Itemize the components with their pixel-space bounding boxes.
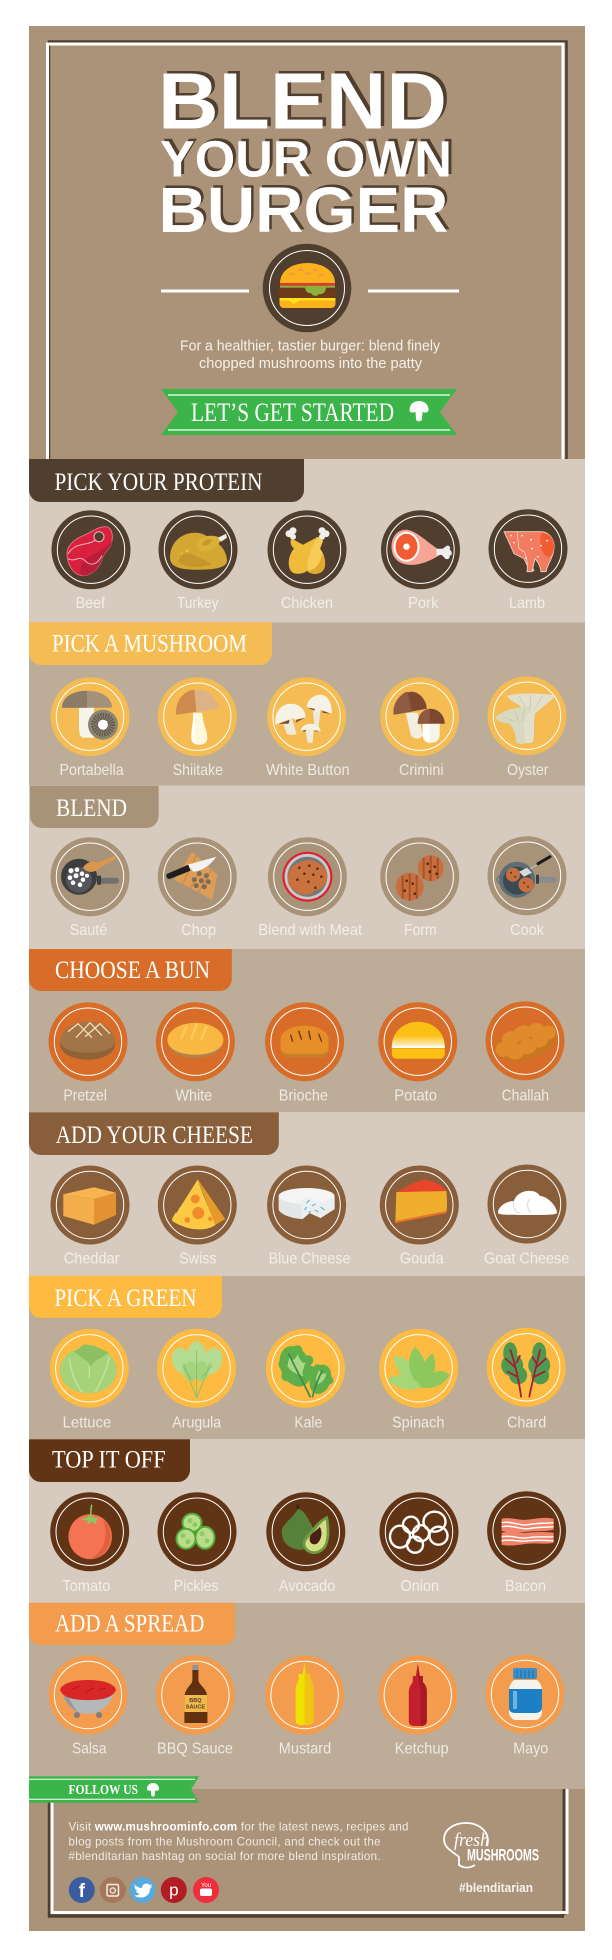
heading: pick your protein bbox=[29, 459, 304, 502]
item: blend with meat: Blend with Meat bbox=[258, 922, 362, 939]
subtitle bbox=[180, 338, 440, 372]
item: portabella: Portabella bbox=[60, 762, 124, 779]
heading: add your cheese bbox=[29, 1112, 279, 1155]
icon: pork bbox=[392, 530, 452, 565]
icon: potato bun bbox=[392, 1022, 445, 1059]
item: onion bbox=[380, 1492, 458, 1595]
section: add your cheese bbox=[29, 1112, 585, 1276]
icon: lettuce bbox=[60, 1344, 117, 1393]
social icons bbox=[69, 1877, 219, 1903]
item: onion: Onion bbox=[400, 1578, 439, 1595]
icon: blue cheese bbox=[279, 1188, 335, 1219]
heading: add a spread bbox=[29, 1603, 235, 1645]
item: cook bbox=[488, 836, 566, 939]
item: bacon: Bacon bbox=[505, 1578, 546, 1595]
icon: chopping board bbox=[166, 852, 217, 900]
item: lettuce bbox=[50, 1329, 129, 1431]
icon: ketchup bottle bbox=[409, 1664, 427, 1726]
icon: shiitake bbox=[176, 690, 218, 745]
item: pickles: Pickles bbox=[174, 1578, 218, 1595]
title: BURGER bbox=[158, 174, 448, 246]
item: chard bbox=[487, 1328, 566, 1431]
section: blend bbox=[29, 786, 585, 949]
item: white button: White Button bbox=[266, 762, 350, 779]
heading: pick your protein: PICK YOUR PROTEIN bbox=[54, 469, 262, 496]
item: turkey bbox=[158, 510, 238, 612]
item: shiitake: Shiitake bbox=[173, 762, 223, 779]
item: chicken: Chicken bbox=[281, 595, 333, 612]
icon: swiss bbox=[172, 1179, 225, 1229]
item: form: Form bbox=[404, 922, 437, 939]
item: portabella bbox=[50, 677, 130, 779]
icon: pinterest bbox=[161, 1877, 187, 1903]
item: goat cheese: Goat Cheese bbox=[484, 1250, 569, 1267]
icon: bacon bbox=[502, 1518, 554, 1546]
item: brioche bbox=[265, 1002, 344, 1105]
item: gouda bbox=[380, 1166, 459, 1267]
banner: follow us: FOLLOW US bbox=[68, 1782, 138, 1797]
item: arugula bbox=[157, 1329, 236, 1431]
item: tomato bbox=[50, 1492, 129, 1595]
icon: facebook: f bbox=[79, 1881, 86, 1902]
item: beef: Beef bbox=[76, 595, 105, 612]
item: oyster: Oyster bbox=[507, 762, 549, 779]
text block: follow info: blog posts from the Mushroom Council, and check out the bbox=[68, 1835, 380, 1848]
item: kale bbox=[266, 1329, 345, 1431]
item: mayo: Mayo bbox=[513, 1740, 548, 1757]
icon: portabella bbox=[62, 691, 118, 740]
section: add a spread bbox=[29, 1603, 585, 1789]
icon: burger badge bbox=[263, 244, 351, 332]
item: spinach bbox=[379, 1329, 458, 1431]
icon: beef bbox=[67, 527, 112, 576]
item: salsa bbox=[48, 1656, 128, 1757]
item: saute bbox=[50, 837, 130, 939]
banner: let's get started: LET’S GET STARTED bbox=[191, 398, 394, 427]
item: chard: Chard bbox=[507, 1414, 546, 1431]
item: chicken bbox=[268, 510, 346, 612]
item: goat cheese bbox=[484, 1164, 569, 1267]
item: oyster bbox=[488, 676, 566, 779]
panel: footer bbox=[29, 1776, 585, 1931]
icon: brioche bbox=[281, 1026, 329, 1058]
heading: choose a bun: CHOOSE A BUN bbox=[55, 957, 210, 984]
icon: grill pan bbox=[497, 857, 557, 898]
section: top it off bbox=[29, 1439, 585, 1603]
icon: youtube: You bbox=[201, 1883, 211, 1889]
item: white bun: White bbox=[175, 1088, 212, 1105]
heading: add your cheese: ADD YOUR CHEESE bbox=[56, 1122, 253, 1149]
item: ketchup: Ketchup bbox=[395, 1740, 449, 1757]
item: potato bbox=[378, 1002, 457, 1105]
icon: instagram bbox=[100, 1877, 126, 1903]
section: pick a mushroom bbox=[29, 622, 585, 786]
item: pork bbox=[381, 510, 460, 612]
title: BURGER bbox=[161, 172, 451, 244]
item: challah: Challah bbox=[502, 1088, 549, 1105]
heading: pick a mushroom: PICK A MUSHROOM bbox=[52, 631, 247, 658]
item: blend with meat bbox=[258, 837, 362, 939]
item: lamb: Lamb bbox=[509, 595, 545, 612]
title: YOUR OWN bbox=[163, 128, 455, 185]
item: cook: Cook bbox=[510, 922, 545, 939]
icon: spinach bbox=[388, 1347, 450, 1389]
icon: goat cheese bbox=[498, 1191, 557, 1215]
heading: choose a bun bbox=[29, 949, 232, 991]
icon: challah bbox=[491, 1017, 561, 1068]
heading: blend bbox=[30, 786, 159, 828]
heading: pick a green bbox=[29, 1276, 222, 1318]
text block: follow info: Visit www.mushroominfo.com for the latest news, recipes and bbox=[68, 1821, 408, 1834]
heading: add a spread: ADD A SPREAD bbox=[55, 1611, 204, 1638]
icon: oyster bbox=[495, 693, 555, 744]
title bbox=[158, 54, 455, 246]
item: challah bbox=[486, 1001, 564, 1105]
item: pickles bbox=[158, 1492, 236, 1595]
icon: mixing bowl bbox=[282, 852, 332, 902]
item: pork: Pork bbox=[408, 595, 439, 612]
icon: white button bbox=[275, 695, 332, 743]
icon: saute pan bbox=[61, 856, 119, 895]
item: lamb bbox=[488, 509, 568, 612]
icon: mayo jar bbox=[509, 1668, 542, 1720]
text block: follow info: #blenditarian hashtag on social for more blend inspiration. bbox=[68, 1850, 380, 1863]
icon: lamb bbox=[504, 532, 554, 572]
item: brioche: Brioche bbox=[279, 1088, 328, 1105]
panel: hero header bbox=[29, 26, 585, 459]
icon: avocado bbox=[282, 1505, 329, 1554]
item: form bbox=[380, 837, 459, 939]
heading: pick a mushroom bbox=[29, 622, 272, 665]
item: cheddar: Cheddar bbox=[64, 1250, 120, 1267]
banner: let's get started bbox=[161, 389, 457, 435]
icon: turkey bbox=[170, 533, 227, 570]
section: pick your protein bbox=[29, 459, 585, 622]
icon: patties bbox=[396, 855, 444, 901]
item: turkey: Turkey bbox=[177, 595, 218, 612]
heading: blend: BLEND bbox=[56, 795, 127, 822]
item: tomato: Tomato bbox=[62, 1578, 110, 1595]
item: spinach: Spinach bbox=[392, 1414, 444, 1431]
icon: arugula bbox=[168, 1341, 227, 1398]
icon: bbq sauce bottle: SAUCE bbox=[186, 1704, 205, 1710]
item: ketchup bbox=[378, 1656, 457, 1757]
item: avocado: Avocado bbox=[279, 1578, 335, 1595]
item: white button bbox=[266, 677, 350, 779]
item: swiss: Swiss bbox=[179, 1250, 216, 1267]
item: chop bbox=[158, 837, 237, 939]
item: kale: Kale bbox=[294, 1414, 322, 1431]
icon: onion bbox=[390, 1512, 448, 1553]
item: avocado bbox=[266, 1492, 345, 1595]
item: chop: Chop bbox=[181, 922, 216, 939]
icon: salsa bbox=[60, 1680, 116, 1718]
item: lettuce: Lettuce bbox=[63, 1414, 111, 1431]
heading: top it off bbox=[29, 1439, 190, 1482]
item: swiss bbox=[158, 1166, 237, 1267]
icon: facebook bbox=[69, 1877, 95, 1903]
icon: pretzel bun bbox=[60, 1022, 115, 1060]
text block: follow info bbox=[68, 1821, 408, 1863]
icon: youtube bbox=[193, 1877, 219, 1903]
item: arugula: Arugula bbox=[172, 1414, 221, 1431]
item: bbq sauce: BBQ Sauce bbox=[157, 1740, 233, 1757]
item: pretzel: Pretzel bbox=[63, 1088, 107, 1105]
icon: pinterest: p bbox=[169, 1880, 179, 1900]
item: shiitake bbox=[158, 677, 237, 779]
icon: crimini bbox=[393, 692, 445, 743]
icon: chicken bbox=[286, 527, 330, 574]
item: saute: Sauté bbox=[70, 922, 107, 939]
item: gouda: Gouda bbox=[400, 1250, 444, 1267]
item: white bun bbox=[156, 1002, 235, 1105]
heading: top it off: TOP IT OFF bbox=[52, 1447, 166, 1474]
item: potato: Potato bbox=[394, 1088, 437, 1105]
item: salsa: Salsa bbox=[72, 1740, 107, 1757]
title: BLEND bbox=[162, 54, 450, 143]
icon: mustard bottle bbox=[296, 1663, 314, 1725]
title: YOUR OWN bbox=[160, 130, 452, 188]
icon: pickles bbox=[176, 1514, 214, 1549]
logo: fresh mushrooms: MUSHROOMS bbox=[467, 1846, 539, 1864]
icon: chard bbox=[501, 1342, 550, 1397]
logo: fresh mushrooms bbox=[444, 1823, 539, 1868]
icon: bbq sauce bottle: BBQ bbox=[189, 1698, 202, 1704]
subtitle: For a healthier, tastier burger: blend finely bbox=[180, 338, 440, 354]
icon: mushroom bbox=[410, 401, 428, 421]
logo: fresh mushrooms: fresh bbox=[454, 1830, 489, 1851]
item: crimini bbox=[380, 677, 459, 779]
item: bbq sauce bbox=[156, 1656, 235, 1757]
banner: follow us bbox=[29, 1776, 199, 1803]
item: crimini: Crimini bbox=[399, 762, 444, 779]
icon: gouda bbox=[395, 1180, 447, 1223]
hashtag: #blenditarian bbox=[459, 1881, 533, 1895]
item: blue cheese bbox=[267, 1166, 350, 1267]
icon: tomato bbox=[68, 1505, 112, 1559]
item: pretzel bbox=[48, 1002, 128, 1105]
item: cheddar bbox=[50, 1166, 130, 1267]
item: mayo bbox=[486, 1654, 564, 1757]
item: bacon bbox=[487, 1491, 566, 1595]
item: mustard bbox=[265, 1656, 344, 1757]
item: beef bbox=[52, 510, 130, 612]
heading: pick a green: PICK A GREEN bbox=[54, 1285, 197, 1312]
section: choose a bun bbox=[29, 949, 585, 1112]
title: BLEND bbox=[158, 56, 447, 146]
icon: mushroom small bbox=[147, 1783, 159, 1796]
icon: white bun bbox=[167, 1023, 223, 1058]
item: blue cheese: Blue Cheese bbox=[269, 1250, 350, 1267]
icon: twitter bbox=[130, 1877, 156, 1903]
subtitle: chopped mushrooms into the patty bbox=[199, 355, 422, 372]
icon: cheddar bbox=[63, 1187, 116, 1225]
icon: bbq sauce bottle bbox=[184, 1665, 207, 1723]
icon: kale bbox=[274, 1341, 335, 1397]
section: pick a green bbox=[29, 1276, 585, 1439]
item: mustard: Mustard bbox=[279, 1740, 331, 1757]
